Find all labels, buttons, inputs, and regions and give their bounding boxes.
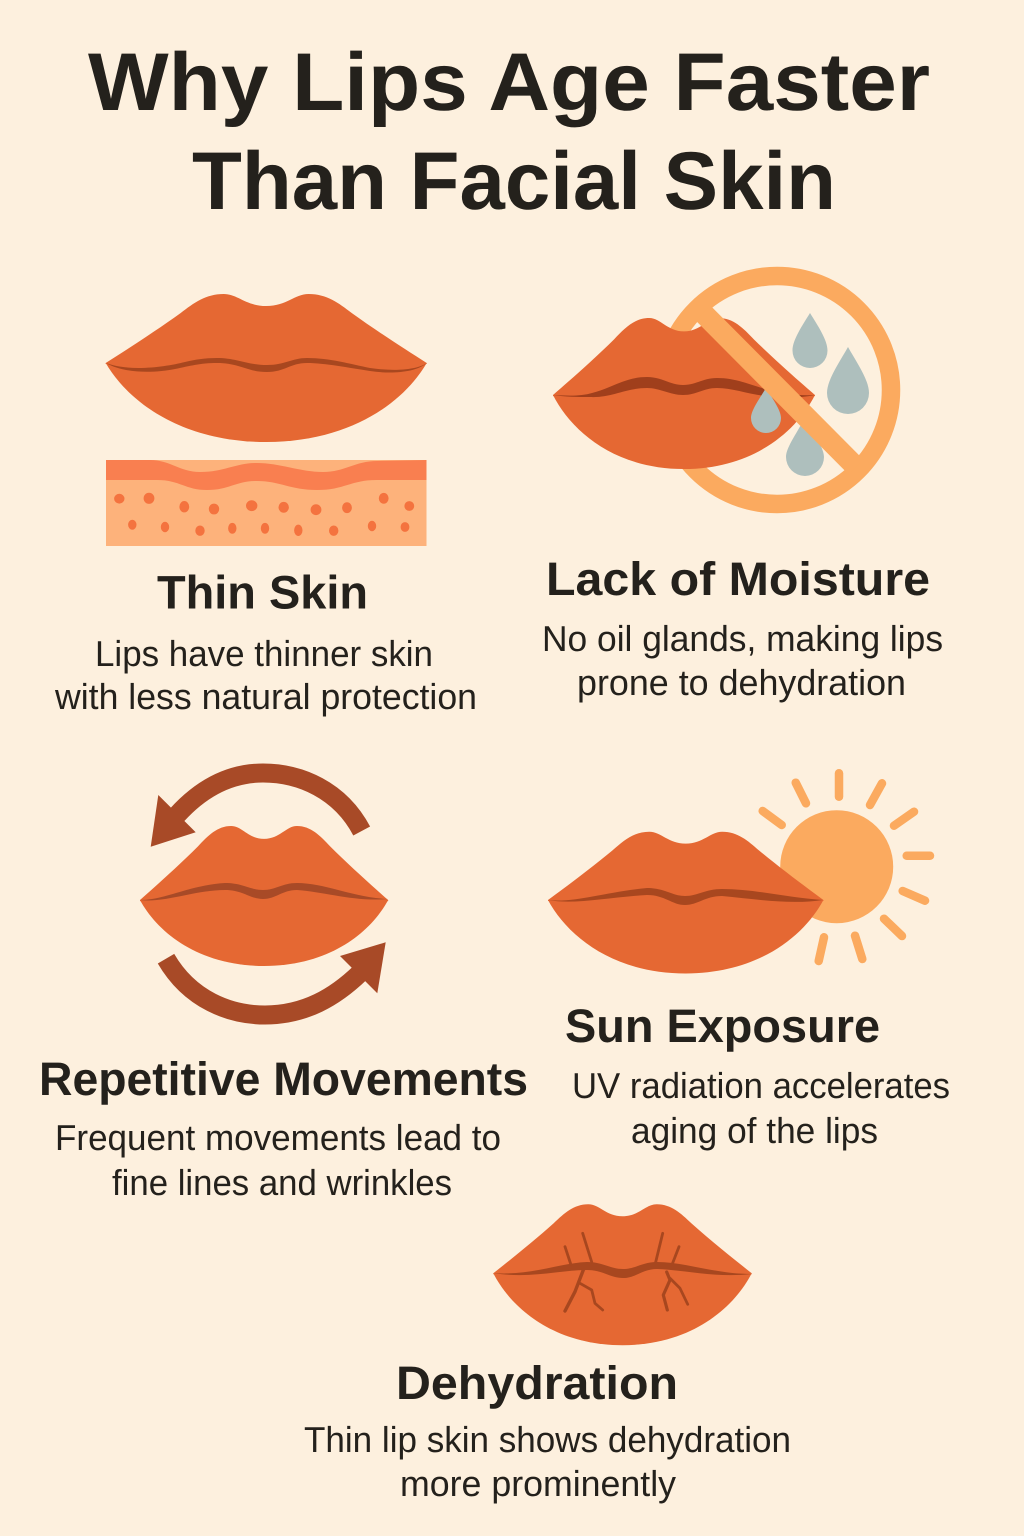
text: sun exposure description: UV radiation accelerates	[572, 1065, 950, 1106]
text: thin skin description: with less natural protection	[54, 676, 477, 717]
heading: thin skin: Thin Skin	[157, 566, 368, 618]
icon: lips	[106, 294, 427, 442]
icon: skin cross-section	[106, 460, 426, 546]
title: Why Lips Age Faster	[88, 37, 930, 128]
panel: lack of moisture	[542, 276, 943, 703]
icon: dry lips with crossed-out water drops	[553, 276, 891, 504]
text: repetitive movements description: Frequent movements lead to	[55, 1117, 501, 1158]
icon: lips with sun	[548, 773, 930, 973]
title	[88, 37, 930, 227]
panel: dehydration	[304, 1204, 791, 1504]
panel: thin skin	[54, 294, 477, 717]
text: repetitive movements description	[55, 1117, 501, 1203]
text: dehydration description: more prominently	[400, 1463, 676, 1504]
text: thin skin description: Lips have thinner skin	[95, 633, 433, 674]
heading: dehydration: Dehydration	[396, 1356, 678, 1409]
icon: cracked lips	[493, 1204, 752, 1345]
title: Than Facial Skin	[192, 136, 836, 227]
text: lack of moisture description: No oil glands, making lips	[542, 618, 943, 659]
icon: lips with circular arrows	[140, 773, 388, 1015]
heading: lack of moisture: Lack of Moisture	[546, 552, 930, 605]
heading: sun exposure: Sun Exposure	[565, 999, 880, 1052]
text: repetitive movements description: fine lines and wrinkles	[112, 1162, 452, 1203]
text: sun exposure description: aging of the lips	[631, 1110, 878, 1151]
panel: sun exposure	[548, 773, 950, 1151]
text: sun exposure description	[572, 1065, 950, 1151]
text: lack of moisture description: prone to dehydration	[577, 662, 906, 703]
heading: repetitive movements: Repetitive Movements	[39, 1052, 528, 1105]
text: dehydration description: Thin lip skin shows dehydration	[304, 1419, 791, 1460]
text: dehydration description	[304, 1419, 791, 1504]
text: lack of moisture description	[542, 618, 943, 703]
text: thin skin description	[54, 633, 477, 717]
panel: repetitive movements	[39, 773, 528, 1203]
